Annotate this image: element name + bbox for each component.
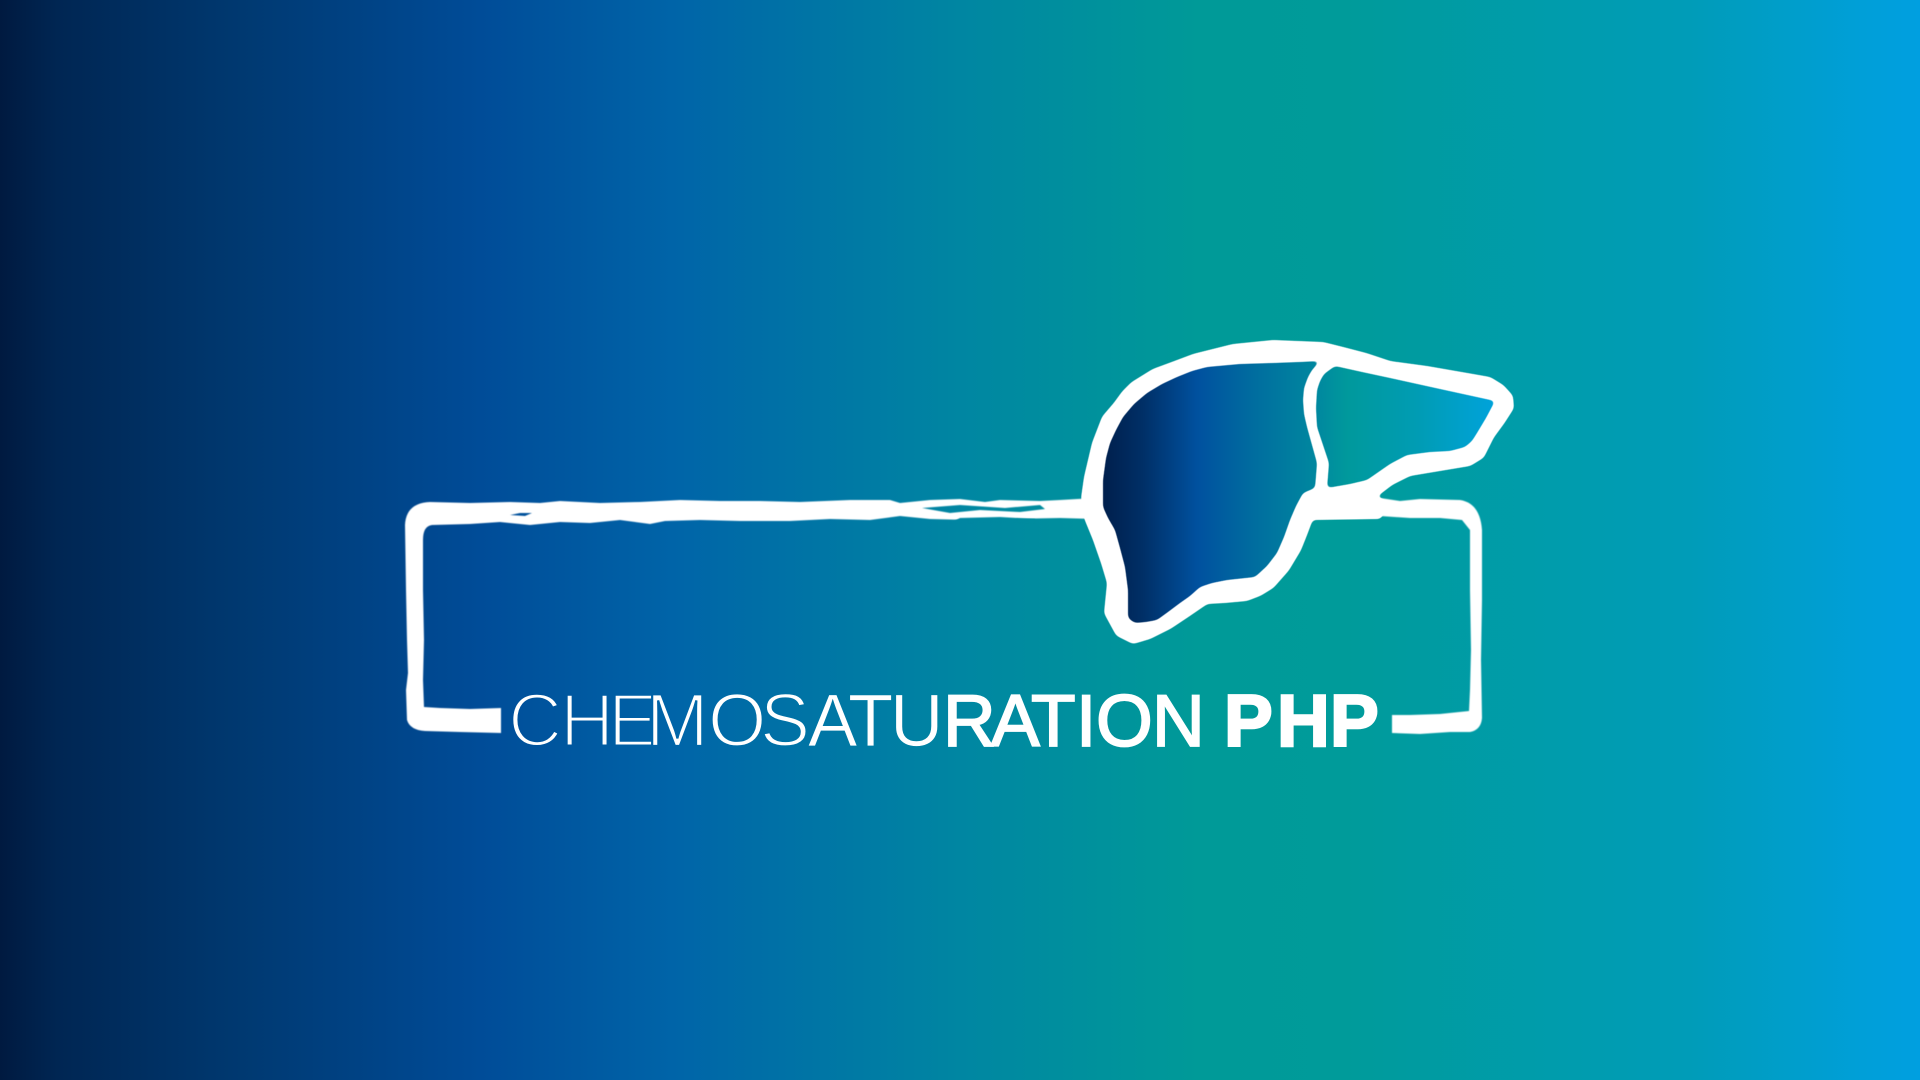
title: medium letters: RATION [943, 681, 1205, 762]
liver: left lobe [1316, 366, 1495, 488]
title: regular letters: ATU [808, 679, 943, 762]
title: light letters: MOS [646, 678, 810, 762]
liver outline [1082, 341, 1513, 643]
frame: left and top brushed line [405, 498, 1095, 733]
title: CHEMOSATURATION PHP [508, 678, 1379, 762]
title: thin letters: CHE [508, 678, 658, 762]
icon: liver [1082, 341, 1513, 643]
logo frame [405, 497, 1482, 734]
frame: right line [1300, 497, 1482, 734]
scratches in the top line [510, 505, 1045, 523]
liver: right lobe [1103, 361, 1320, 623]
title: heavy letters: PHP [1224, 681, 1379, 762]
